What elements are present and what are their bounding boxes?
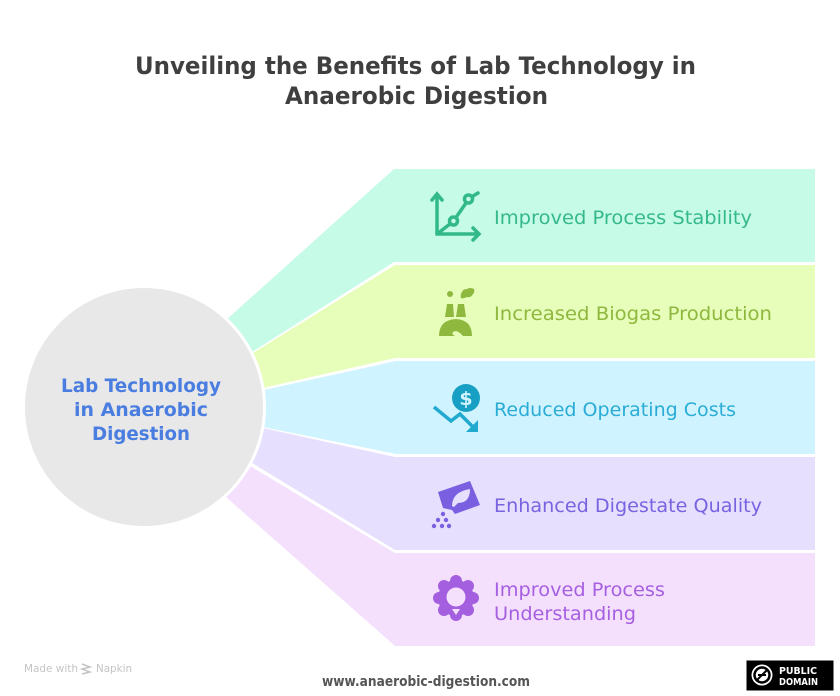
label: improved process understanding (494, 579, 665, 625)
icon: biogas plant (439, 288, 474, 336)
public domain badge (747, 661, 833, 690)
icon: gear with lightbulb (433, 575, 479, 621)
central label (61, 375, 222, 445)
panel: improved process stability (226, 169, 815, 352)
central circle (22, 285, 266, 529)
website: www.anaerobic-digestion.com (322, 674, 530, 690)
label: enhanced digestate quality: Enhanced Digestate Quality (494, 495, 762, 517)
central label: in Anaerobic (74, 399, 208, 421)
title (135, 52, 696, 110)
label: increased biogas production: Increased Biogas Production (494, 303, 772, 325)
napkin credit: Made with (24, 662, 78, 675)
napkin credit: Napkin (96, 662, 132, 675)
label: improved process stability: Improved Process Stability (494, 207, 752, 229)
title: Unveiling the Benefits of Lab Technology in (135, 52, 696, 80)
panel: increased biogas production (253, 265, 815, 388)
icon: dollar and falling arrow (434, 384, 480, 432)
label: improved process understanding: Improved Process (494, 579, 665, 601)
panel: enhanced digestate quality (252, 428, 815, 550)
title: Anaerobic Digestion (285, 82, 548, 110)
public domain badge: PUBLIC (779, 666, 817, 677)
label: reduced operating costs: Reduced Operating Costs (494, 399, 736, 421)
icon: line chart (432, 193, 479, 240)
panel: reduced operating costs (263, 361, 815, 454)
label: improved process understanding: Understanding (494, 603, 636, 625)
panel: improved process understanding (226, 466, 815, 646)
icon: dollar and falling arrow: $ (459, 388, 473, 410)
central label: Lab Technology (61, 375, 222, 397)
napkin credit (24, 662, 132, 675)
public domain badge: DOMAIN (779, 677, 818, 688)
central label: Digestion (92, 423, 190, 445)
icon: leaf card with dots (432, 481, 480, 528)
